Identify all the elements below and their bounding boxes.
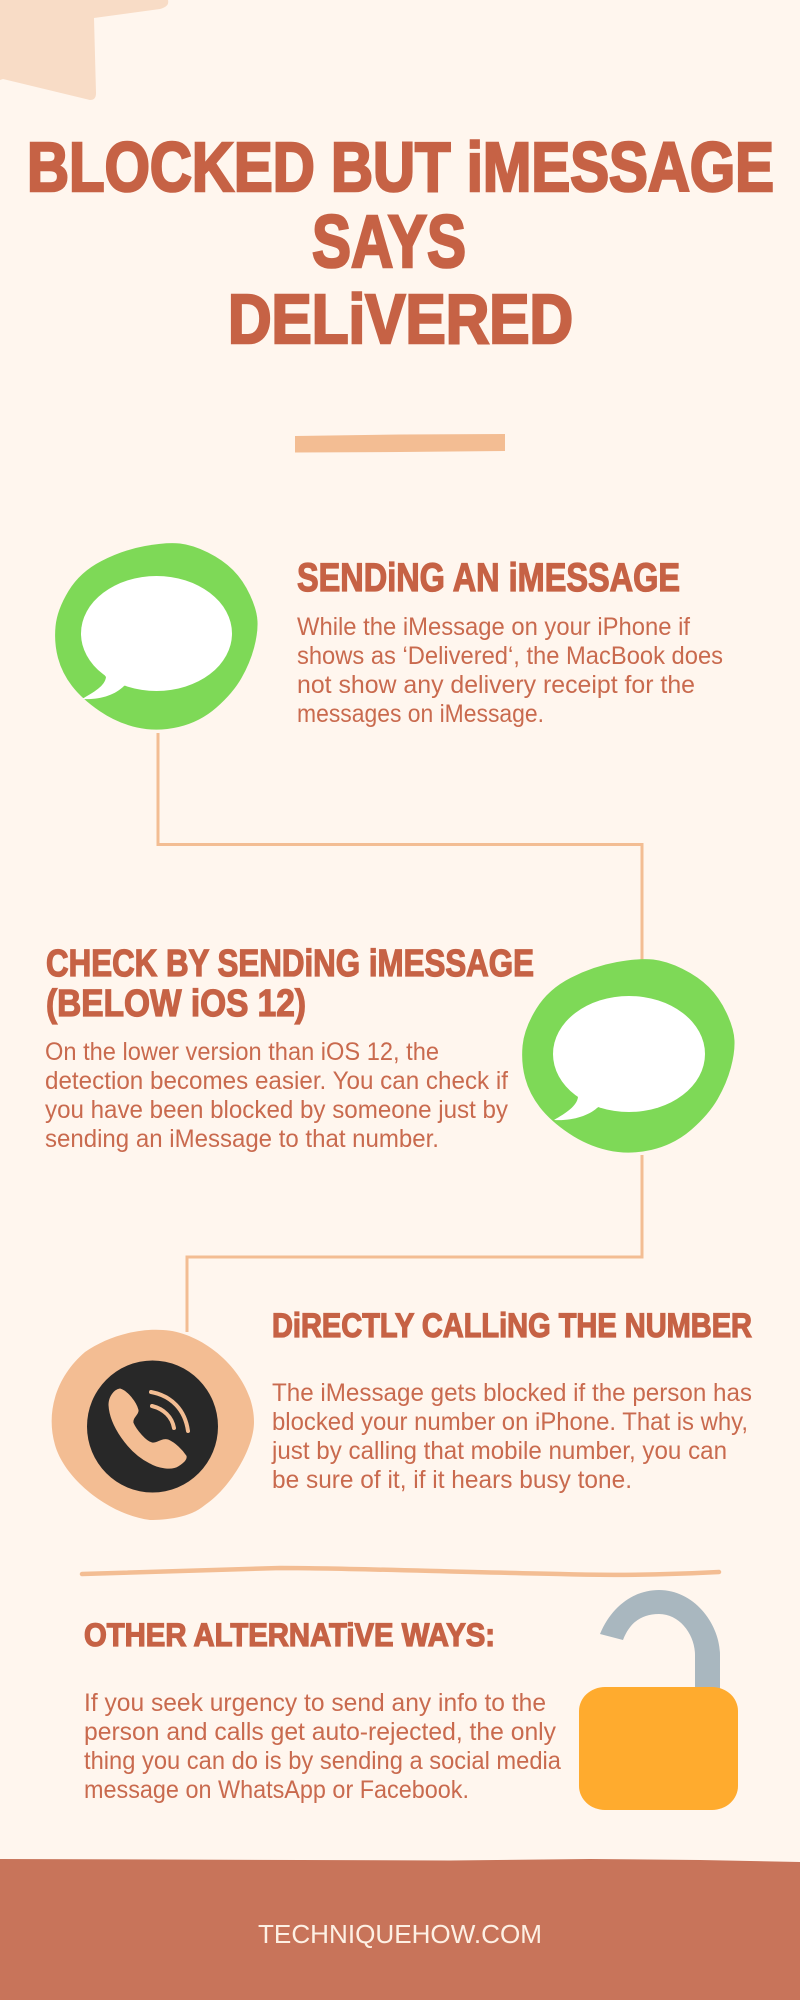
other ways heading: OTHER ALTERNATiVE WAYS: — [84, 1617, 495, 1653]
title: SAYS — [312, 200, 466, 283]
connector line: step 2 to step 3 — [187, 1155, 642, 1332]
title: DELiVERED — [228, 280, 573, 358]
step 2 body text: you have been blocked by someone just by — [45, 1096, 508, 1124]
other ways body text: If you seek urgency to send any info to the — [84, 1689, 546, 1717]
other ways body text — [84, 1689, 561, 1804]
step 2 body text: On the lower version than iOS 12, the — [45, 1038, 439, 1066]
step 1 body text: messages on iMessage. — [297, 700, 544, 728]
step 1 body text — [297, 613, 723, 728]
icon: green chat bubble 1 — [55, 543, 258, 730]
icon: phone in peach blob — [52, 1330, 254, 1520]
other ways body text: thing you can do is by sending a social media — [84, 1747, 561, 1775]
step 2 heading: (BELOW iOS 12) — [46, 983, 306, 1025]
step 2 body text: sending an iMessage to that number. — [45, 1125, 439, 1153]
step 2 body text: detection becomes easier. You can check if — [45, 1067, 508, 1095]
other ways body text: person and calls get auto-rejected, the only — [84, 1718, 556, 1746]
icon: green chat bubble 2 — [522, 959, 735, 1153]
title — [27, 128, 774, 358]
step 2 heading: CHECK BY SENDiNG iMESSAGE — [46, 943, 534, 985]
step 3 body text: The iMessage gets blocked if the person has — [272, 1379, 752, 1407]
step 3 body text: be sure of it, if it hears busy tone. — [272, 1466, 632, 1494]
step 2 body text — [45, 1038, 508, 1153]
icon: open padlock — [579, 1590, 738, 1810]
step 1 body text: shows as ‘Delivered‘, the MacBook does — [297, 642, 723, 670]
step 1 body text: not show any delivery receipt for the — [297, 671, 695, 699]
decorative star corner — [0, 0, 168, 100]
connector line: step 1 to step 2 — [158, 733, 642, 960]
step 3 body text — [271, 1379, 752, 1494]
title underline bar — [295, 434, 505, 452]
footer website text: TECHNIQUEHOW.COM — [258, 1919, 542, 1949]
footer band — [0, 1859, 800, 2000]
other ways body text: message on WhatsApp or Facebook. — [84, 1776, 469, 1804]
step 1 heading: SENDiNG AN iMESSAGE — [297, 556, 680, 600]
step 1 body text: While the iMessage on your iPhone if — [297, 613, 690, 641]
step 2 heading — [46, 943, 534, 1025]
step 3 body text: blocked your number on iPhone. That is why, — [272, 1408, 748, 1436]
step 3 body text: just by calling that mobile number, you can — [271, 1437, 727, 1465]
